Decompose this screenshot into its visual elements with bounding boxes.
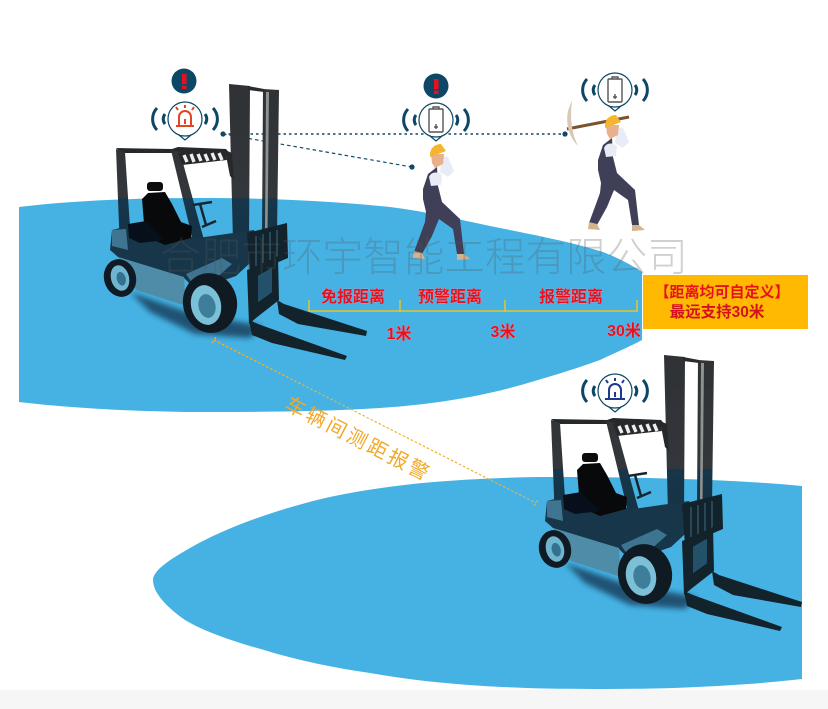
backrest bars (256, 230, 277, 266)
helmet (605, 115, 621, 128)
rear shoulder panel (112, 229, 128, 250)
cab roof (116, 147, 231, 162)
vehicle distance label: 车辆间测距报警 (281, 393, 435, 486)
carriage window shade (258, 268, 272, 302)
alert badge: near worker (424, 74, 448, 98)
signal bubble: forklift (153, 102, 217, 140)
zone label: no alarm: 免报距离 (321, 287, 385, 306)
phone icon: near worker (429, 107, 443, 132)
bottom strip (0, 690, 828, 709)
worker: far (588, 115, 645, 231)
signal bubble: far worker (583, 73, 647, 111)
dotted link: forklift to near worker (223, 134, 412, 167)
worker: near (413, 144, 470, 260)
phone icon: far worker (608, 77, 622, 102)
distance ruler (309, 300, 637, 312)
watermark: 合肥市环宇智能工程有限公司 (160, 234, 688, 280)
signal bubble: rear forklift (583, 374, 647, 412)
ground shadow (130, 292, 262, 338)
arm back (604, 144, 617, 157)
floor deck (128, 221, 165, 243)
front wheel (177, 268, 243, 338)
cab right post (225, 150, 234, 180)
face (606, 125, 619, 139)
siren icon: red (176, 105, 194, 126)
arm raised (615, 127, 629, 148)
fender panel (186, 258, 232, 286)
callout: custom distance (643, 275, 808, 329)
mast chain (265, 92, 269, 232)
seat headrest (147, 182, 163, 191)
siren icon: blue (605, 378, 625, 399)
mark: 3 m: 3米 (491, 323, 515, 341)
shoes (588, 222, 645, 231)
carriage backrest (247, 223, 288, 274)
blue zone: second forklift (153, 477, 802, 689)
zone label: pre-warning: 预警距离 (418, 287, 482, 306)
seat (142, 192, 192, 245)
mast right rail (262, 89, 279, 235)
body rear cover (110, 226, 264, 290)
dash and steering (193, 202, 216, 227)
fork right (277, 300, 367, 336)
zone label: alarm: 报警距离 (539, 287, 603, 306)
rear wheel (100, 256, 140, 300)
mast crossbar (248, 86, 264, 92)
forklift: front (100, 84, 367, 360)
link end dots (220, 131, 568, 170)
fork left (249, 320, 347, 360)
signal bubble: near worker (404, 103, 468, 141)
vehicle distance line (212, 337, 538, 506)
guard slats (184, 153, 222, 162)
mast left post (229, 84, 250, 242)
blue zone: first forklift (19, 198, 642, 412)
mark: 30 m: 30米 (607, 322, 641, 340)
body side panel (118, 257, 186, 306)
overalls (589, 138, 639, 225)
callout: custom distance: 最远支持30米 (670, 303, 765, 321)
dotted link: forklift to far worker (223, 133, 565, 135)
forklift: rear (535, 355, 802, 631)
roof guard (178, 151, 227, 165)
alert badge: forklift (172, 68, 196, 94)
cab front post (171, 150, 204, 245)
cab rear post (116, 149, 134, 256)
callout: custom distance: 【距离均可自定义】 (654, 283, 790, 301)
pickaxe (567, 101, 629, 146)
carriage lower frame (247, 256, 279, 324)
mark: 1 m: 1米 (387, 325, 411, 343)
